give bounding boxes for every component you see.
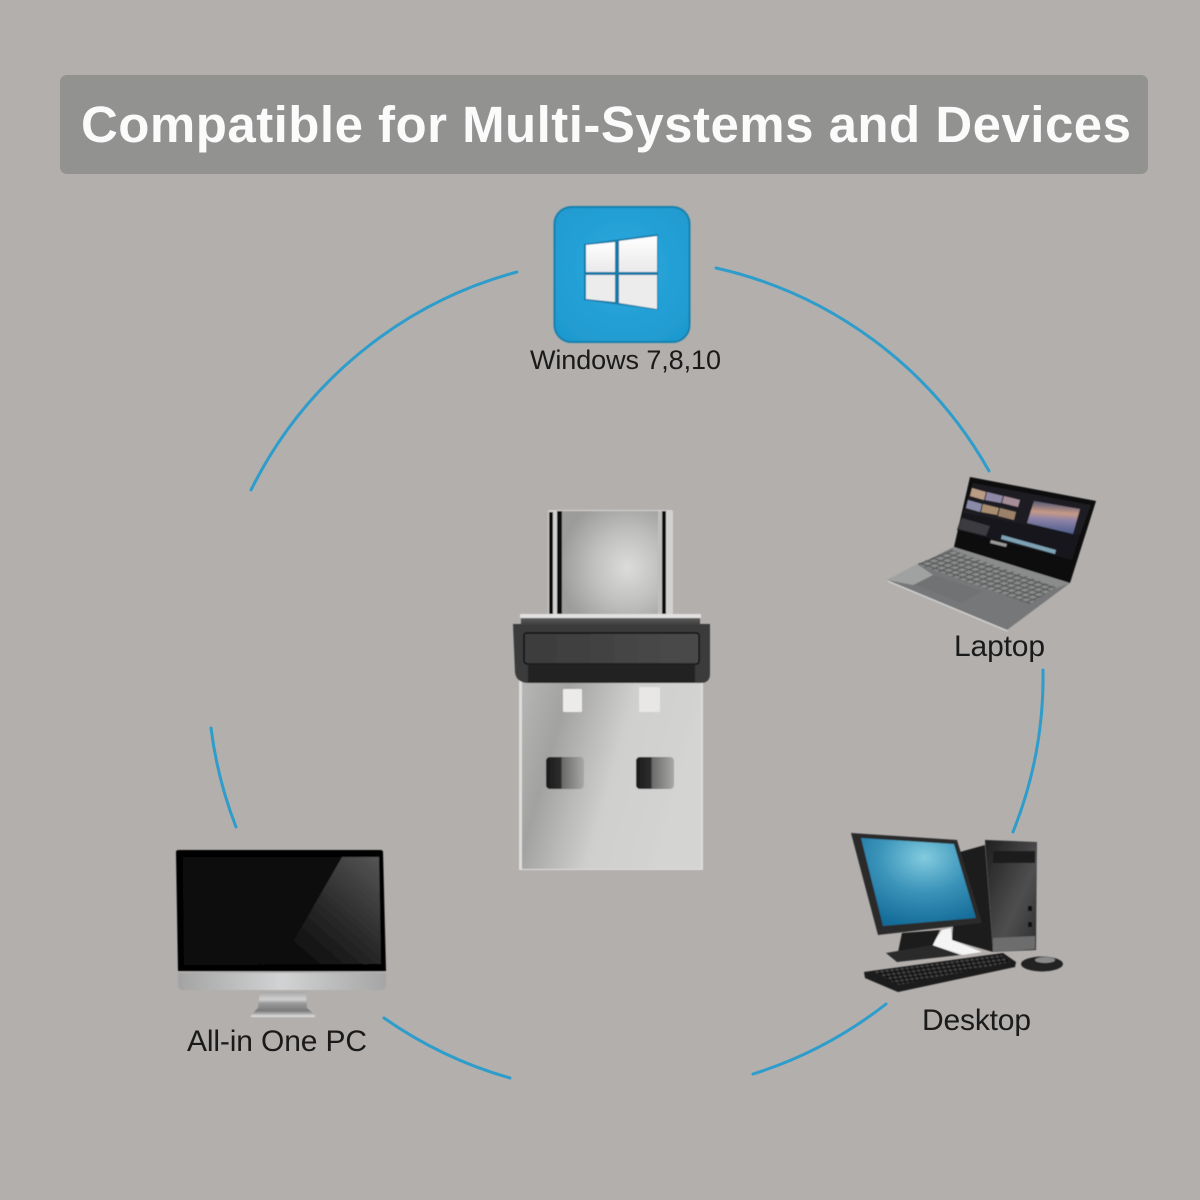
icon: usb dongle	[513, 510, 710, 870]
black collar	[513, 614, 710, 683]
mouse	[1021, 956, 1063, 972]
white shadow patch	[932, 928, 982, 955]
label: all-in one pc: All-in One PC	[187, 1025, 367, 1058]
icon: windows tile	[554, 207, 690, 342]
icon: laptop	[887, 477, 1096, 632]
tower	[952, 840, 1037, 952]
label: windows: Windows 7,8,10	[530, 345, 721, 375]
monitor stand	[886, 930, 960, 962]
keyboard	[864, 953, 1016, 992]
usb-a plug	[519, 680, 703, 870]
monitor	[851, 833, 982, 935]
title banner	[60, 75, 1148, 174]
label: desktop: Desktop	[922, 1004, 1031, 1037]
icon: desktop computer	[851, 833, 1063, 992]
usb-c connector	[548, 510, 673, 615]
icon: all-in-one pc	[176, 850, 386, 1017]
connecting ring arcs	[211, 268, 1043, 1078]
title banner: Compatible for Multi-Systems and Devices	[81, 96, 1131, 153]
label: laptop: Laptop	[954, 630, 1045, 663]
